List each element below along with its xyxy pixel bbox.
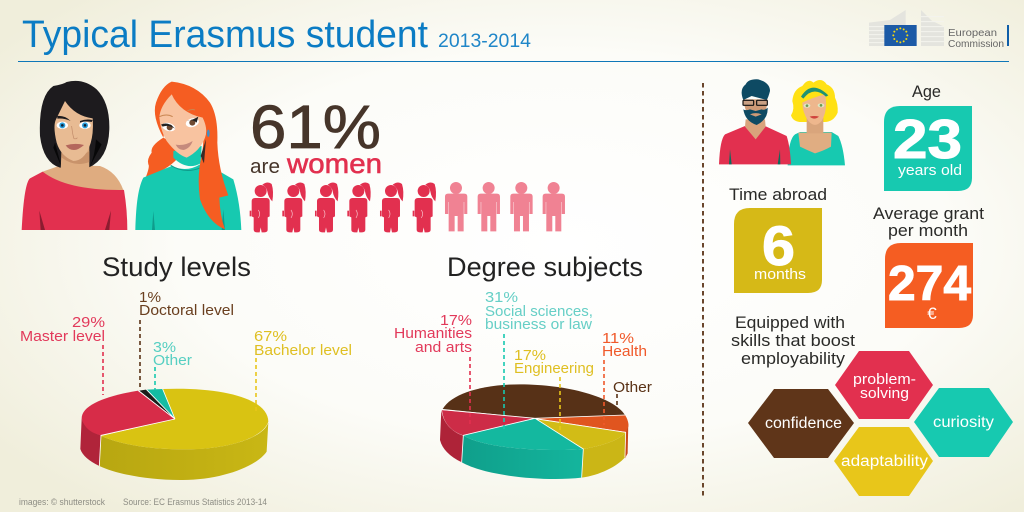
label: bachelor level	[254, 329, 352, 359]
label: master level: Master level	[20, 329, 105, 345]
label: humanities and arts	[394, 313, 472, 356]
heading: degree subjects: Degree subjects	[447, 252, 643, 282]
heading: skills: skills that boost	[731, 331, 855, 350]
label: health: Health	[602, 344, 647, 360]
panel: average grant: €	[927, 304, 937, 323]
panel: time abroad: 6	[762, 214, 795, 277]
skill hexagon: confidence: confidence	[765, 415, 842, 432]
heading: skills: Equipped with	[735, 313, 845, 332]
logo: European Commission: Commission	[948, 38, 1004, 50]
panel: average grant: per month	[888, 221, 968, 240]
panel: average grant	[873, 204, 984, 328]
label: doctoral level	[139, 290, 234, 319]
skill hexagon: confidence	[748, 389, 854, 458]
title: 2013-2014	[438, 31, 531, 52]
label: health: 11%	[602, 331, 634, 347]
skill hexagon: curiosity	[914, 388, 1013, 457]
pictogram row: 6 of 10 women	[250, 182, 565, 232]
label: bachelor level: Bachelor level	[254, 343, 352, 359]
label: bachelor level: 67%	[254, 329, 287, 345]
skill hexagon: problem-solving: solving	[860, 385, 909, 402]
label: humanities and arts: Humanities	[394, 326, 472, 342]
label: engineering: Engineering	[514, 361, 594, 377]
source note: images: © shutterstock	[19, 497, 105, 507]
illustration: couple	[719, 79, 845, 165]
heading: skills	[731, 313, 855, 368]
pie chart: degree subjects	[440, 334, 628, 479]
label: social sciences: 31%	[485, 290, 518, 306]
stat: 61% are women: 61%	[250, 93, 381, 161]
label: engineering	[514, 348, 594, 377]
skill hexagon: curiosity: curiosity	[933, 414, 994, 431]
stat: 61% are women: women	[286, 148, 382, 179]
label: social sciences: Social sciences,	[485, 304, 593, 320]
label: health	[602, 331, 647, 360]
skill hexagon: problem-solving: problem-	[853, 371, 916, 388]
panel: age: years old	[898, 162, 962, 179]
label: master level: 29%	[72, 315, 105, 331]
logo: European Commission: European	[948, 27, 997, 39]
label: doctoral level: Doctoral level	[139, 303, 234, 319]
skill hexagon: adaptability: adaptability	[841, 453, 928, 470]
panel: time abroad: months	[754, 266, 806, 283]
title: Typical Erasmus student	[22, 14, 428, 56]
label: humanities and arts: and arts	[415, 340, 472, 356]
label: other: Other	[153, 353, 192, 369]
label: other	[153, 340, 192, 369]
heading: skills: employability	[741, 349, 846, 368]
stat: 61% are women: are	[250, 156, 280, 178]
label: social sciences: business or law	[485, 317, 593, 333]
label: social sciences	[485, 290, 593, 333]
panel: age	[884, 82, 972, 191]
source note	[19, 497, 267, 507]
panel: time abroad: Time abroad	[729, 185, 827, 204]
illustration: red-haired woman	[135, 82, 241, 230]
panel: age: Age	[912, 82, 941, 101]
heading: study levels: Study levels	[102, 252, 251, 282]
source note: Source: EC Erasmus Statistics 2013-14	[123, 497, 267, 507]
label: engineering: 17%	[514, 348, 546, 364]
label: master level	[20, 315, 105, 345]
skill hexagon: adaptability	[834, 427, 933, 496]
skill hexagon: problem-solving	[835, 351, 933, 419]
label: doctoral level: 1%	[139, 290, 161, 306]
label: other: 3%	[153, 340, 176, 356]
panel: time abroad	[729, 185, 827, 293]
illustration: dark-haired woman	[22, 81, 127, 230]
logo: European Commission	[869, 10, 1009, 50]
panel: average grant: Average grant	[873, 204, 984, 223]
pie chart: study levels	[80, 320, 268, 480]
panel: age: 23	[893, 108, 962, 170]
panel: average grant: 274	[888, 257, 971, 311]
label: other subjects: Other	[613, 380, 652, 396]
label: humanities and arts: 17%	[440, 313, 472, 329]
